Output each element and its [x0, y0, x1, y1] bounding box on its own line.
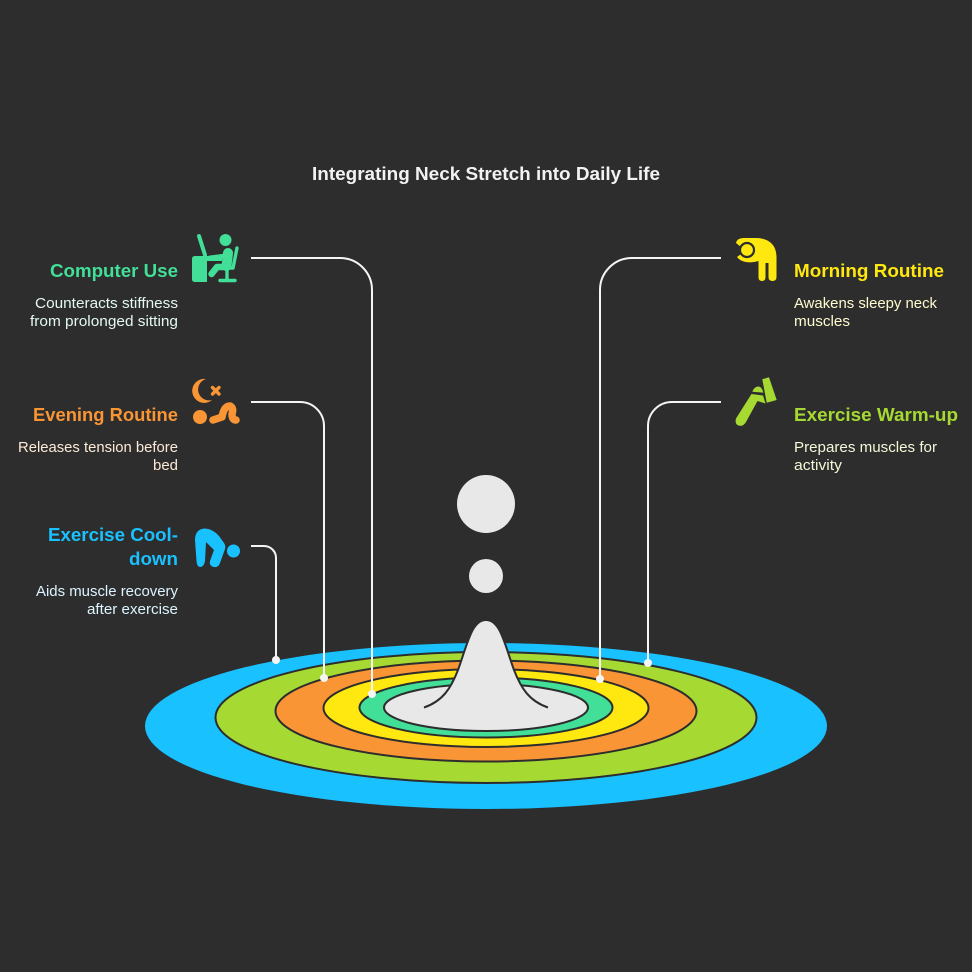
ring: morning routine	[324, 669, 648, 747]
description: Counteracts stiffness	[35, 295, 178, 312]
water drop peak	[424, 620, 548, 708]
icon: person side bending	[733, 238, 776, 281]
icon: person at computer	[192, 234, 237, 282]
small droplet	[469, 559, 503, 593]
icon: person bending forward	[195, 528, 240, 567]
description: after exercise	[87, 601, 178, 618]
heading: Exercise Cool-	[48, 525, 178, 545]
heading	[48, 525, 178, 569]
description	[794, 439, 937, 474]
panel: computer use	[30, 234, 237, 330]
icon: person stretching arm	[736, 377, 777, 426]
ring: centre	[384, 684, 588, 731]
heading: Exercise Warm-up	[794, 405, 958, 425]
description	[18, 439, 178, 474]
connector: evening routine	[251, 402, 328, 682]
description: Releases tension before	[18, 439, 178, 456]
description: bed	[153, 457, 178, 474]
heading: Morning Routine	[794, 261, 944, 281]
ring: exercise warm-up	[216, 652, 756, 783]
panel: evening routine	[18, 379, 236, 474]
ring: computer use	[360, 678, 612, 738]
description	[36, 583, 178, 618]
icon: moon and stretching person	[192, 379, 236, 424]
panel: exercise warm-up	[736, 377, 958, 474]
description: from prolonged sitting	[30, 313, 178, 330]
connector: morning routine	[596, 258, 721, 683]
heading: Computer Use	[50, 261, 178, 281]
connector: computer use	[251, 258, 376, 698]
heading: down	[129, 549, 178, 569]
description: Aids muscle recovery	[36, 583, 178, 600]
title: Integrating Neck Stretch into Daily Life	[312, 164, 660, 184]
concentric ripple rings	[145, 643, 827, 809]
panel: morning routine	[733, 238, 944, 330]
description: Prepares muscles for	[794, 439, 937, 456]
connector: exercise warm-up	[644, 402, 721, 667]
heading: Evening Routine	[33, 405, 178, 425]
panel: exercise cool-down	[36, 525, 240, 618]
ring: exercise cool-down	[145, 643, 827, 809]
description: Awakens sleepy neck	[794, 295, 937, 312]
description	[794, 295, 937, 330]
description: muscles	[794, 313, 850, 330]
description	[30, 295, 178, 330]
ring: evening routine	[276, 660, 696, 762]
large droplet	[457, 475, 515, 533]
connector: exercise cool-down	[251, 546, 280, 664]
description: activity	[794, 457, 843, 474]
